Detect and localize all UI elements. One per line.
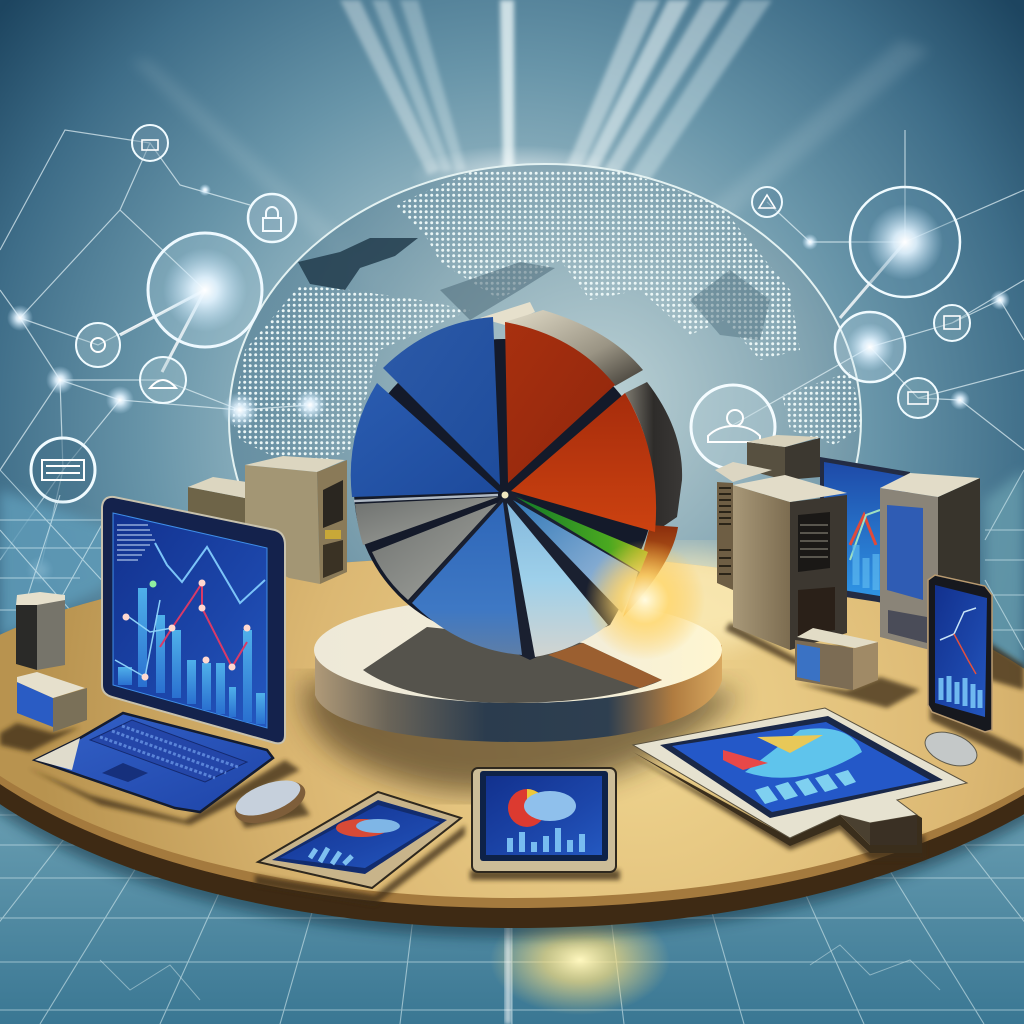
small glowing points (802, 234, 1010, 410)
slice: blue left (351, 383, 499, 497)
slice: blue bottom (412, 502, 522, 655)
pie extrusion top (480, 302, 535, 325)
slice: silver upper (355, 497, 498, 545)
mouse right (920, 726, 982, 772)
server: right tower (880, 473, 980, 652)
floor grid (0, 780, 1024, 1024)
icon: gear node (76, 323, 120, 367)
slice: light blue (513, 500, 638, 613)
server: right group (715, 435, 820, 590)
light rays (130, 0, 930, 290)
floor (0, 700, 1024, 1024)
icon: server node (934, 305, 970, 341)
small unit left (17, 672, 87, 732)
small server left (16, 592, 65, 670)
node: star left (148, 233, 262, 347)
globe (228, 163, 862, 562)
icon: triangle node (752, 187, 782, 217)
icon: monitor node (898, 378, 938, 418)
laptop base (35, 713, 273, 812)
slice: silver lower (372, 503, 497, 600)
network right (691, 130, 1024, 469)
horizon grid right (985, 470, 1024, 690)
tablet: right large (633, 708, 967, 853)
table glow (600, 550, 780, 650)
bottom glow (490, 905, 670, 1015)
network left (0, 125, 326, 584)
phone right (928, 575, 992, 732)
laptop chart bars (118, 588, 265, 724)
icon: user circle (691, 385, 775, 469)
icon: lock (248, 194, 296, 242)
laptop (35, 497, 285, 812)
pedestal shadow (363, 627, 662, 703)
table (0, 550, 1024, 938)
pie centre (502, 492, 508, 498)
horizon grid left (0, 470, 145, 640)
slice: red top (505, 322, 615, 483)
slice highlight (354, 495, 498, 501)
icon: top node (132, 125, 168, 161)
server: left back tall (245, 456, 347, 584)
pie extrusion orange (623, 525, 678, 617)
icon: keyboard node (31, 438, 95, 502)
device shadows (0, 622, 1024, 905)
icon: user node (140, 357, 186, 403)
pie glow (585, 540, 705, 660)
pedestal orange reflection (548, 643, 662, 688)
table shadow: pedestal (304, 680, 735, 793)
slice: pale (507, 503, 608, 657)
pedestal (314, 597, 722, 742)
laptop screen (102, 497, 285, 743)
server: left back small (188, 477, 287, 545)
continents dotted (232, 170, 864, 470)
laptop chart lines (155, 543, 265, 603)
pie extrusion right (625, 382, 682, 532)
server: right front (733, 475, 847, 650)
pie backing (354, 339, 654, 639)
slice: green (516, 497, 648, 572)
tablet: left flat (258, 792, 461, 888)
laptop text lines (117, 525, 155, 560)
small glowing points (7, 184, 326, 584)
tablet: centre (472, 768, 616, 872)
pie chart (351, 302, 705, 660)
node: star right (850, 187, 960, 297)
monitor: right chart (820, 457, 910, 607)
small unit right (795, 628, 878, 690)
node: star lower right (835, 312, 905, 382)
mouse left (229, 772, 311, 832)
slice: red right (511, 393, 656, 532)
slice: blue top (383, 317, 500, 485)
